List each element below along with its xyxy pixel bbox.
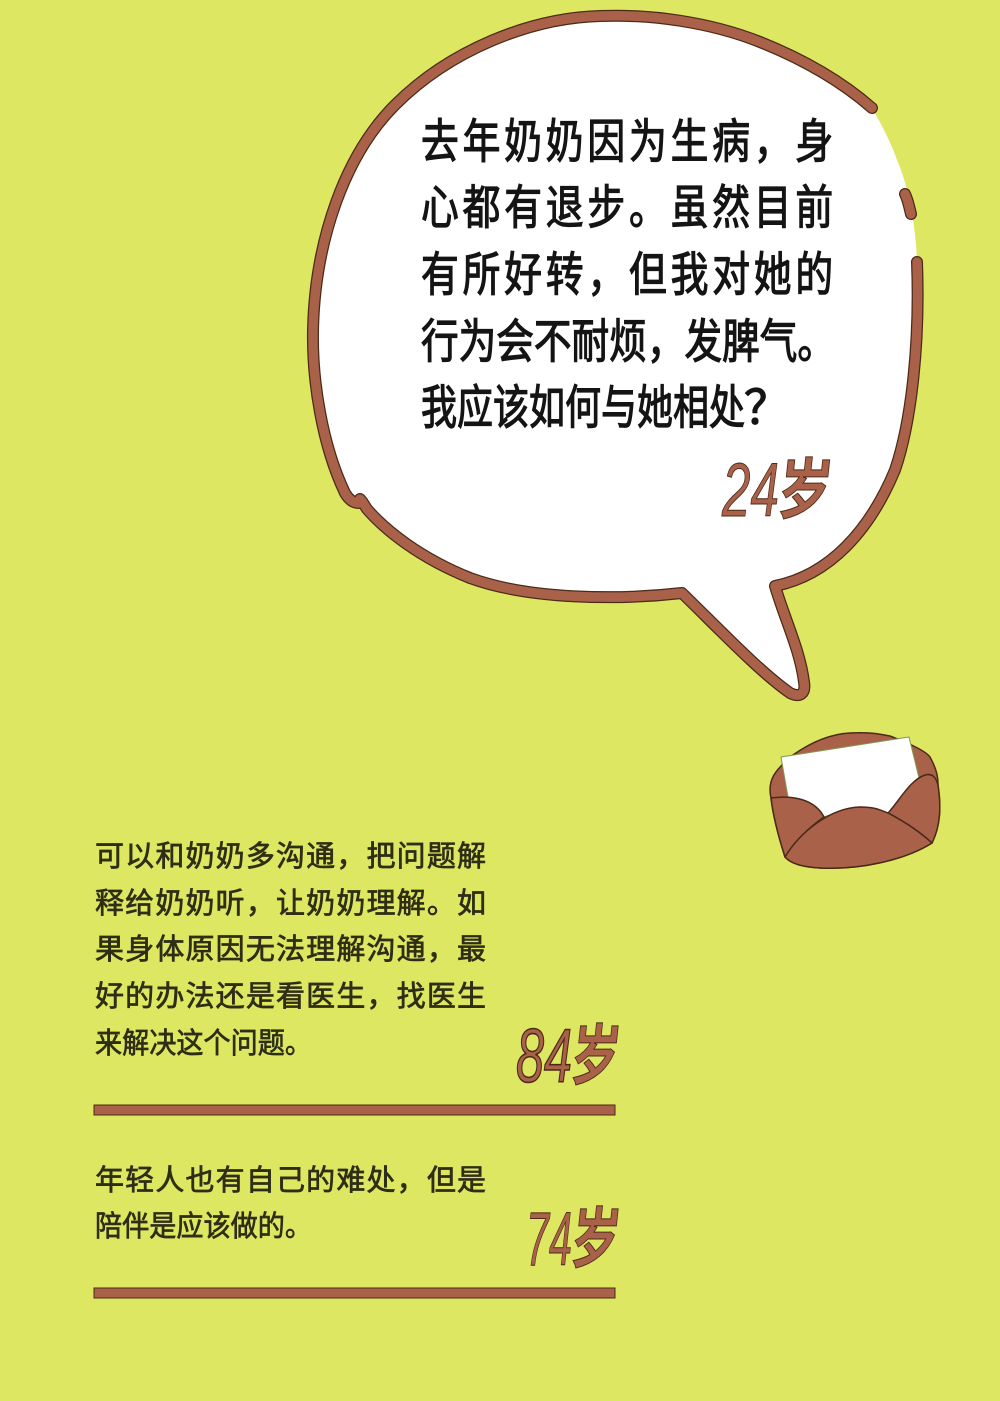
answer text: 84岁: 释给奶奶听，让奶奶理解。如 [95, 887, 486, 920]
age label: 84岁: 岁 [567, 1020, 624, 1094]
question text: 有所好转，但我对她的 [421, 249, 833, 302]
answer text: 84岁: 好的办法还是看医生，找医生 [95, 980, 486, 1013]
age label: 74岁: 岁 [567, 1203, 624, 1277]
answer text: 84岁 [95, 840, 486, 1060]
bubble outline: main stroke [313, 16, 918, 695]
question text: 我应该如何与她相处 [421, 382, 745, 435]
question text [421, 116, 835, 435]
divider bar [94, 1105, 615, 1115]
age label: 24岁: 24 [721, 448, 779, 533]
answer text: 84岁: 来解决这个问题。 [95, 1027, 312, 1060]
question text: 行为会不耐烦，发脾气。 [421, 316, 835, 369]
question text: 心都有退步。虽然目前 [421, 182, 833, 235]
question text: 去年奶奶因为生病，身 [421, 116, 833, 169]
age label: 74岁: 74 [526, 1197, 572, 1282]
answer text: 84岁: 可以和奶奶多沟通，把问题解 [95, 840, 486, 873]
speech bubble [313, 16, 918, 695]
divider bar [94, 1288, 615, 1298]
age label: 24岁: 岁 [774, 454, 836, 528]
answer text: 74岁 [95, 1164, 486, 1243]
question text: ？ [744, 382, 790, 434]
answer text: 74岁: 年轻人也有自己的难处，但是 [95, 1164, 486, 1197]
answer text: 74岁: 陪伴是应该做的。 [95, 1210, 312, 1243]
age label: 84岁: 84 [516, 1014, 572, 1099]
icon: envelope [770, 733, 940, 868]
answer text: 84岁: 果身体原因无法理解沟通，最 [95, 933, 486, 966]
